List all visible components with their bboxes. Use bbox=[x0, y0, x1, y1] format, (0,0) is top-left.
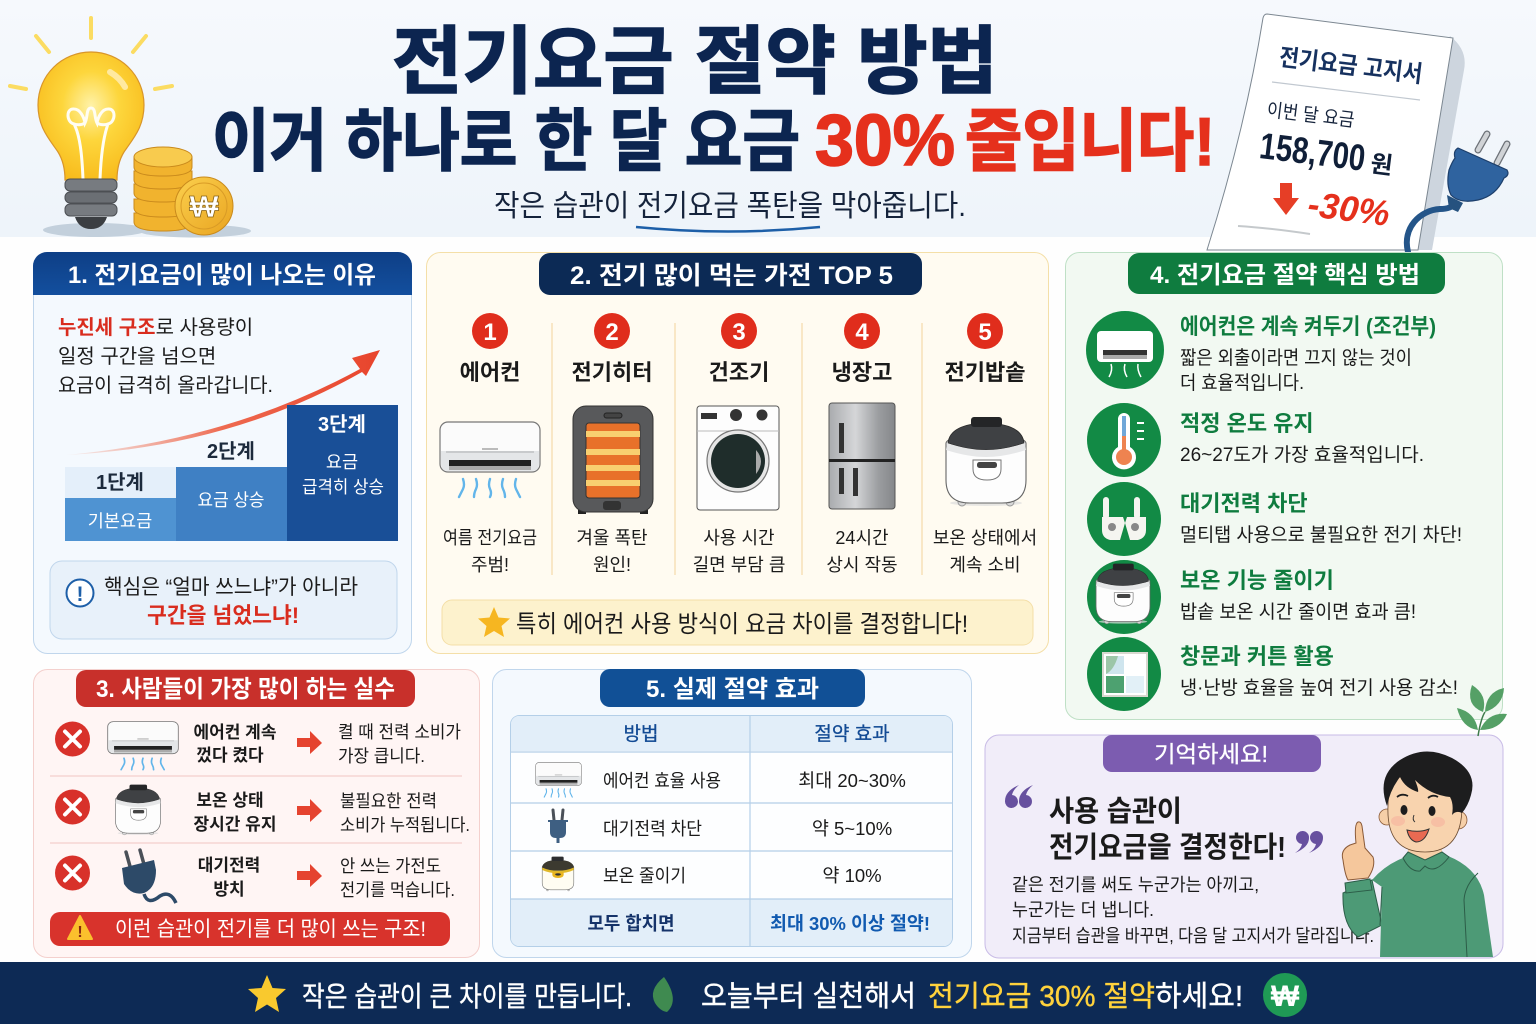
callout: key point bbox=[50, 561, 397, 639]
table: savings by method: 최대 30% 이상 절약! bbox=[770, 913, 930, 934]
item 1: air conditioner: 1 bbox=[483, 319, 497, 346]
item 5: rice cooker: 전기밥솥 bbox=[945, 360, 1025, 385]
table: savings by method: 절약 효과 bbox=[814, 723, 890, 745]
callout: key point: ! bbox=[76, 583, 84, 606]
chart: step bars: 2단계 bbox=[207, 440, 255, 463]
chart: step bars: 기본요금 bbox=[88, 511, 152, 531]
item 3: dryer: 길면 부담 큼 bbox=[693, 555, 785, 575]
item 5: rice cooker: 5 bbox=[978, 319, 992, 346]
heading 3 bbox=[76, 670, 415, 707]
heading 5: 5. 실제 절약 효과 bbox=[646, 676, 819, 703]
icon: light bulb with rays bbox=[10, 18, 172, 237]
panel: remember bbox=[985, 685, 1507, 958]
method 4: reduce warm mode: 보온 기능 줄이기 bbox=[1180, 568, 1334, 593]
icon: star bbox=[248, 975, 286, 1012]
mistake 3: 안 쓰는 가전도 bbox=[340, 856, 441, 876]
warning bar: 이런 습관이 전기를 더 많이 쓰는 구조! bbox=[115, 918, 426, 941]
warning bar: ! bbox=[77, 924, 83, 941]
heading 1 bbox=[33, 252, 412, 295]
table: savings by method: 모두 합치면 bbox=[588, 913, 674, 934]
item 3: dryer bbox=[693, 313, 785, 575]
icon: won coin: ₩ bbox=[1271, 980, 1300, 1013]
title: 전기요금 절약 방법 bbox=[392, 20, 998, 103]
item 3: dryer: 3 bbox=[732, 319, 746, 346]
method 2: proper temperature bbox=[1087, 403, 1424, 477]
text: progressive pricing explanation: 누진세 구조로 사용량이 bbox=[58, 316, 253, 339]
icon: electricity bill: 이번 달 요금 bbox=[1266, 99, 1356, 132]
item 5: rice cooker bbox=[933, 313, 1037, 575]
warning bar bbox=[50, 912, 450, 946]
icon: won coin bbox=[1263, 973, 1307, 1017]
chart: step bars: 1단계 bbox=[96, 471, 144, 494]
item 1: air conditioner bbox=[440, 313, 540, 575]
text: remember body: 같은 전기를 써도 누군가는 아끼고, bbox=[1012, 875, 1259, 895]
method 5: windows and curtains bbox=[1087, 637, 1458, 711]
icon: electricity bill: 158,700 bbox=[1257, 125, 1368, 179]
method 5: windows and curtains: 냉·난방 효율을 높여 전기 사용 감소! bbox=[1180, 677, 1458, 699]
item 4: refrigerator: 4 bbox=[855, 319, 869, 346]
method 1: keep aircon on: 에어컨은 계속 켜두기 (조건부) bbox=[1180, 314, 1436, 339]
title: 줄입니다! bbox=[965, 104, 1215, 180]
mistake 2: 장시간 유지 bbox=[194, 815, 276, 834]
icon: leaf bbox=[653, 977, 673, 1012]
quote: 사용 습관이 bbox=[1049, 795, 1182, 828]
mistake 3: 전기를 먹습니다. bbox=[340, 880, 455, 900]
mistake 1: 껐다 켰다 bbox=[196, 746, 264, 765]
item 3: dryer: 건조기 bbox=[709, 360, 769, 385]
table: savings by method bbox=[510, 716, 952, 946]
mistake 1: 가장 큽니다. bbox=[338, 746, 425, 766]
method 5: windows and curtains: 창문과 커튼 활용 bbox=[1180, 644, 1334, 669]
panel 2: top 5 appliances bbox=[426, 252, 1048, 654]
callout: aircon usage: 특히 에어컨 사용 방식이 요금 차이를 결정합니다! bbox=[516, 611, 968, 638]
icon: electricity bill: 원 bbox=[1369, 151, 1394, 180]
table: savings by method: 에어컨 효율 사용 bbox=[603, 771, 721, 791]
mistake 1: 켤 때 전력 소비가 bbox=[338, 722, 461, 742]
heading 3: 3. 사람들이 가장 많이 하는 실수 bbox=[96, 676, 395, 703]
quote bbox=[1005, 785, 1323, 864]
item 2: electric heater bbox=[572, 313, 653, 575]
heading 1: 1. 전기요금이 많이 나오는 이유 bbox=[68, 262, 376, 289]
item 2: electric heater: 겨울 폭탄 bbox=[576, 528, 648, 548]
title: 이거 하나로 한 달 요금 bbox=[212, 104, 800, 180]
method 1: keep aircon on: 짧은 외출이라면 끄지 않는 것이 bbox=[1180, 347, 1412, 369]
mistake 2: 보온 상태 bbox=[196, 791, 264, 810]
callout: key point: 구간을 넘었느냐! bbox=[147, 603, 299, 628]
icon: electricity bill bbox=[1207, 14, 1465, 250]
item 4: refrigerator: 24시간 bbox=[835, 528, 889, 548]
mistake 2: 소비가 누적됩니다. bbox=[340, 815, 470, 835]
mistake 1 bbox=[55, 722, 461, 770]
table: savings by method: 보온 줄이기 bbox=[603, 866, 686, 886]
illustration: pointing man bbox=[1342, 751, 1493, 957]
heading: remember: 기억하세요! bbox=[1154, 741, 1268, 767]
method 2: proper temperature: 26~27도가 가장 효율적입니다. bbox=[1180, 444, 1424, 466]
icon: stack of won coins bbox=[134, 147, 251, 238]
heading: remember bbox=[1103, 735, 1321, 772]
title: 30% bbox=[815, 101, 955, 181]
chart: step bars bbox=[65, 405, 398, 541]
method 1: keep aircon on bbox=[1086, 311, 1436, 394]
mistake 2: 불필요한 전력 bbox=[340, 791, 437, 811]
item 5: rice cooker: 보온 상태에서 bbox=[933, 528, 1037, 548]
method 2: proper temperature: 적정 온도 유지 bbox=[1180, 411, 1314, 436]
method 3: cut standby power: 대기전력 차단 bbox=[1180, 491, 1308, 516]
item 4: refrigerator: 상시 작동 bbox=[826, 555, 898, 575]
text: remember body: 지금부터 습관을 바꾸면, 다음 달 고지서가 달라집니다. bbox=[1012, 926, 1374, 946]
mistake 3: 대기전력 bbox=[198, 856, 260, 875]
heading 4: 4. 전기요금 절약 핵심 방법 bbox=[1150, 262, 1420, 289]
icon: electricity bill: -30% bbox=[1306, 183, 1392, 234]
heading 5 bbox=[600, 669, 865, 707]
panel 5: actual savings bbox=[492, 669, 972, 958]
mistake 3: 방치 bbox=[213, 880, 245, 899]
item 4: refrigerator: 냉장고 bbox=[832, 360, 892, 385]
arrow: rising curve bbox=[66, 350, 380, 455]
table: savings by method: 대기전력 차단 bbox=[603, 819, 702, 839]
item 4: refrigerator bbox=[826, 313, 898, 575]
chart: step bars: 요금 bbox=[326, 452, 358, 472]
icon: stack of won coins: ₩ bbox=[189, 189, 219, 224]
footer band: 오늘부터 실천해서 bbox=[701, 981, 916, 1013]
table: savings by method: 방법 bbox=[624, 723, 658, 745]
method 1: keep aircon on: 더 효율적입니다. bbox=[1180, 372, 1304, 394]
header band bbox=[0, 0, 1536, 237]
item 2: electric heater: 2 bbox=[605, 319, 619, 346]
text: progressive pricing explanation: 일정 구간을 넘으면 bbox=[58, 345, 216, 368]
icon: electricity bill: 전기요금 고지서 bbox=[1278, 44, 1424, 88]
item 1: air conditioner: 여름 전기요금 bbox=[443, 528, 537, 548]
method 4: reduce warm mode: 밥솥 보온 시간 줄이면 효과 큼! bbox=[1180, 601, 1416, 623]
footer band: 하세요! bbox=[1155, 980, 1243, 1013]
text: progressive pricing explanation bbox=[58, 316, 273, 397]
icon: leaves bbox=[1457, 685, 1507, 736]
mistake 3 bbox=[55, 850, 455, 903]
panel 3: common mistakes bbox=[34, 670, 480, 958]
chart: step bars: 요금 상승 bbox=[198, 490, 264, 510]
text: remember body bbox=[1012, 875, 1374, 946]
chart: step bars: 급격히 상승 bbox=[302, 477, 384, 497]
panel 1: why the bill is high bbox=[33, 252, 412, 654]
mistake 2 bbox=[55, 785, 470, 835]
title bbox=[212, 20, 1215, 181]
footer band bbox=[0, 962, 1536, 1024]
footer band: 전기요금 30% 절약 bbox=[928, 980, 1155, 1013]
item 2: electric heater: 전기히터 bbox=[572, 360, 652, 385]
table: savings by method: 최대 20~30% bbox=[798, 770, 906, 791]
item 1: air conditioner: 주범! bbox=[471, 555, 509, 575]
item 1: air conditioner: 에어컨 bbox=[460, 360, 520, 385]
chart: step bars: 3단계 bbox=[318, 413, 366, 436]
item 2: electric heater: 원인! bbox=[593, 555, 631, 575]
table: savings by method: 약 5~10% bbox=[812, 818, 892, 839]
callout: aircon usage bbox=[442, 600, 1033, 645]
method 4: reduce warm mode bbox=[1087, 560, 1416, 634]
icon: power plug bbox=[1407, 134, 1508, 252]
footer band: 작은 습관이 큰 차이를 만듭니다. bbox=[302, 981, 632, 1012]
method 3: cut standby power bbox=[1087, 482, 1462, 556]
item 5: rice cooker: 계속 소비 bbox=[949, 555, 1021, 575]
subtitle: 작은 습관이 전기요금 폭탄을 막아줍니다. bbox=[494, 190, 966, 223]
callout: key point: 핵심은 “얼마 쓰느냐”가 아니라 bbox=[104, 576, 358, 599]
method 3: cut standby power: 멀티탭 사용으로 불필요한 전기 차단! bbox=[1180, 524, 1462, 546]
heading 2 bbox=[539, 253, 922, 295]
text: remember body: 누군가는 더 냅니다. bbox=[1012, 900, 1154, 920]
item 3: dryer: 사용 시간 bbox=[703, 528, 775, 548]
heading 2: 2. 전기 많이 먹는 가전 TOP 5 bbox=[570, 262, 893, 290]
panel 4: key saving methods bbox=[1066, 252, 1502, 720]
mistake 1: 에어컨 계속 bbox=[194, 723, 276, 742]
table: savings by method: 약 10% bbox=[822, 865, 882, 886]
text: progressive pricing explanation: 요금이 급격히 올라갑니다. bbox=[58, 374, 273, 397]
heading 4 bbox=[1128, 253, 1445, 294]
quote: 전기요금을 결정한다! bbox=[1049, 831, 1286, 864]
